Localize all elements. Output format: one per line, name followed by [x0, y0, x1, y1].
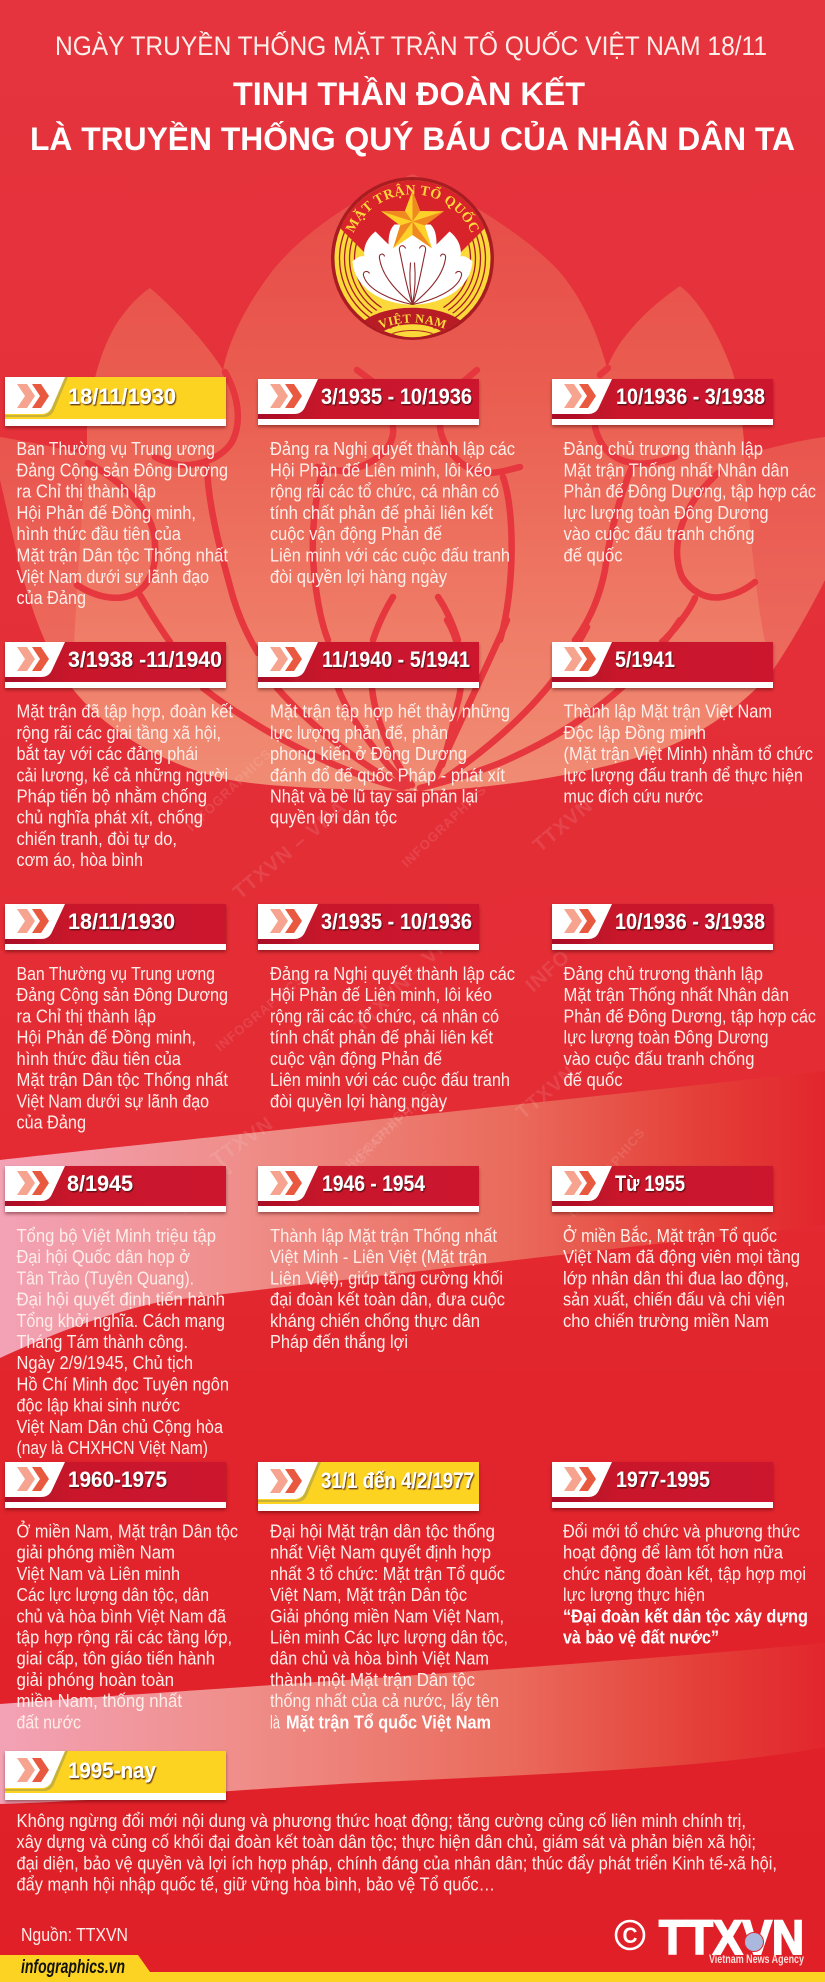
text: Không ngừng đổi mới: Không ngừng đổi mới nội dung và phương thức hoạt động; tăng cường củng cố liên minh chính trị, — [16, 1810, 746, 1831]
text: Thành lập Mặt trận Thống nhất: Liên Việt), giúp tăng cường khối — [270, 1267, 503, 1288]
watermarks: TTXVN – VNA — [350, 921, 465, 1037]
text: Đại hội Mặt trận dân tộc: Đại hội Mặt trận dân tộc thống — [270, 1520, 495, 1542]
header: 18/11/1930: 18/11/1930 — [68, 909, 175, 934]
text: Đảng ra Nghị quyết: Liên minh với các cuộc đấu tranh — [270, 544, 510, 566]
header: 10/1936 - 3/1938 — [552, 379, 773, 425]
text: Ở miền Bắc: cho chiến trường miền Nam — [563, 1310, 769, 1331]
text: Đại hội Mặt trận dân tộc: Giải phóng miền Nam Việt Nam, — [270, 1605, 504, 1626]
text: Thành lập Mặt trận Thống nhất: Pháp đến thắng lợi — [270, 1331, 408, 1352]
text: Đại hội Mặt trận dân tộc: thành một Mặt trận Dân tộc — [270, 1669, 475, 1690]
text: Ban Thường vụ: Việt Nam dưới sự lãnh đạo — [16, 566, 209, 587]
text: Ban Thường vụ: ra Chỉ thị thành lập — [16, 481, 156, 502]
header: 10/1936 - 3/1938: 10/1936 - 3/1938 — [616, 384, 765, 409]
header: 11/1940 - 5/1941 — [258, 642, 479, 688]
text: Đại hội Mặt trận dân tộc: thống nhất của cả nước, lấy tên — [270, 1690, 499, 1711]
header: 5/1941 — [552, 642, 773, 688]
text: Đảng ra Nghị quyết (repeat): Hội Phản đế Liên minh, lôi kéo — [270, 984, 492, 1005]
logo: TTXVN: TTXVN — [659, 1912, 804, 1965]
text: Ban Thường vụ: Hội Phản đế Đồng minh, — [16, 502, 196, 523]
text: Đảng ra Nghị quyết (repeat): rộng rãi các tổ chức, cá nhân có — [270, 1005, 499, 1026]
diagonal band lower — [0, 1643, 825, 1804]
text: Đảng chủ trương: đế quốc — [564, 544, 622, 566]
text: Ban Thường vụ: hình thức đầu tiên của — [16, 523, 182, 544]
text: Ở miền Nam: Các lực lượng dân tộc, dân — [16, 1584, 209, 1605]
header: 10/1936 - 3/1938 (repeat) — [552, 904, 773, 950]
emblem: Mặt trận Tổ quốc Việt Nam: MẶT TRẬN — [345, 184, 416, 234]
text: Đảng chủ trương (repeat): vào cuộc đấu tranh chống — [564, 1048, 754, 1069]
emblem: Mặt trận Tổ quốc Việt Nam — [331, 177, 494, 340]
text: Thành lập Mặt trận Thống nhất: Việt Minh - Liên Việt (Mặt trận — [270, 1246, 487, 1267]
text: Ở miền Bắc: lớp nhân dân thi đua lao động, — [563, 1267, 789, 1288]
header: 1977-1995 — [552, 1462, 773, 1508]
header: 1960-1975: 1960-1975 — [68, 1467, 167, 1492]
header: 11/1940 - 5/1941: 11/1940 - 5/1941 — [322, 647, 470, 672]
text: Đảng ra Nghị quyết: Hội Phản đế Liên minh, lôi kéo — [270, 459, 492, 480]
header: 8/1945: 8/1945 — [67, 1171, 133, 1196]
watermarks: INFOGRAPHICS — [399, 782, 489, 870]
text: Tổng bộ Việt Minh: Hồ Chí Minh đọc Tuyên ngôn — [16, 1373, 229, 1394]
text: Thành lập Mặt trận Việt Nam: Thành lập Mặt trận Việt Nam — [564, 701, 772, 722]
text: Đảng ra Nghị quyết: cuộc vận động Phản đế — [270, 523, 443, 544]
text: Đại hội Mặt trận dân tộc: Mặt trận Tổ quốc Việt Nam — [286, 1711, 491, 1732]
text: Ban Thường vụ (repeat) — [16, 963, 228, 1133]
text: Ban Thường vụ (repeat): của Đảng — [16, 1112, 86, 1133]
text: Mặt trận đã tập hợp — [16, 701, 233, 870]
text: Đảng chủ trương: lực lượng toàn Đông Dương — [564, 502, 768, 523]
text: Ban Thường vụ: Mặt trận Dân tộc Thống nhất — [16, 544, 228, 566]
text: Ban Thường vụ (repeat): Hội Phản đế Đồng minh, — [16, 1027, 196, 1048]
emblem: Mặt trận Tổ quốc Việt Nam: TỔ QUỐC — [420, 186, 479, 232]
text: Đổi mới tổ chức: lực lượng thực hiện — [563, 1584, 705, 1605]
text: Ban Thường vụ (repeat): Mặt trận Dân tộc Thống nhất — [16, 1069, 228, 1090]
text: Đảng ra Nghị quyết: Đảng ra Nghị quyết thành lập các — [270, 438, 515, 459]
text: Thành lập Mặt trận Thống nhất: kháng chiến chống thực dân — [270, 1310, 480, 1331]
text: Đại hội Mặt trận dân tộc: Liên minh Các lực lượng dân tộc, — [270, 1626, 508, 1648]
watermarks: TTXVN – VNA — [229, 796, 351, 904]
header: 10/1936 - 3/1938 (repeat): 10/1936 - 3/1938 — [615, 909, 765, 934]
text: Đổi mới tổ chức — [563, 1520, 808, 1648]
logo: TTXVN: C — [622, 1923, 638, 1948]
header: 1995-nay (highlight): 1995-nay — [68, 1758, 157, 1783]
text: Ở miền Nam — [16, 1520, 238, 1732]
text: Ở miền Nam: đất nước — [16, 1711, 81, 1732]
watermarks: INFOGRAPHICS — [212, 971, 307, 1054]
text: Ban Thường vụ (repeat): Ban Thường vụ Trung ương — [16, 963, 215, 984]
text: Mặt trận tập hợp — [270, 701, 510, 828]
watermarks: INFOGRAPHICS — [565, 1125, 648, 1220]
text: Đảng ra Nghị quyết (repeat) — [270, 963, 515, 1111]
text: Đại hội Mặt trận dân tộc: là — [270, 1711, 280, 1732]
ribbon — [364, 308, 460, 332]
text: Tổng bộ Việt Minh: Tổng khởi nghĩa. Cách mạng — [16, 1310, 225, 1331]
text: Đảng chủ trương (repeat): lực lượng toàn Đông Dương — [564, 1027, 768, 1048]
title: TINH THẦN ĐOÀN KẾT — [233, 76, 585, 112]
star — [381, 190, 444, 248]
text: Đảng chủ trương: Mặt trận Thống nhất Nhân dân — [564, 459, 789, 480]
text: Thành lập Mặt trận Thống nhất: Thành lập Mặt trận Thống nhất — [270, 1225, 497, 1246]
text: Tổng bộ Việt Minh: Tháng Tám thành công. — [16, 1331, 188, 1352]
text: Đại hội Mặt trận dân tộc: Việt Nam, Mặt trận Dân tộc — [270, 1584, 467, 1605]
watermarks: INFO — [522, 946, 575, 997]
text: Thành lập Mặt trận Việt Nam: Độc lập Đồng minh — [564, 722, 706, 743]
text: Ban Thường vụ: Đảng Cộng sản Đông Dương — [16, 459, 228, 480]
text: Ở miền Nam: Việt Nam và Liên minh — [16, 1563, 180, 1584]
header: 18/11/1930 (highlight) — [5, 377, 226, 426]
text: Mặt trận đã tập hợp: Mặt trận đã tập hợp, đoàn kết — [16, 701, 233, 722]
text: Mặt trận đã tập hợp: bắt tay với các đảng phái — [16, 743, 198, 764]
text: Ban Thường vụ: của Đảng — [16, 587, 86, 608]
text: Ở miền Nam: giải phóng miền Nam — [16, 1542, 175, 1563]
text: Ở miền Nam: giải phóng hoàn toàn — [16, 1669, 174, 1690]
header: 31/1 đến 4/2/1977 (highlight) — [258, 1462, 479, 1511]
text: Ở miền Nam: tập hợp rộng rãi các tầng lớp, — [16, 1626, 232, 1648]
text: Đảng chủ trương (repeat): Mặt trận Thống nhất Nhân dân — [564, 984, 789, 1005]
text: Tổng bộ Việt Minh: Đại hội Quốc dân họp ở — [16, 1246, 190, 1267]
text: Mặt trận tập hợp: Nhật và bè lũ tay sai phản lại — [270, 786, 478, 806]
header: 3/1938 -11/1940 — [5, 642, 226, 688]
text: Đảng chủ trương (repeat): đế quốc — [564, 1069, 622, 1090]
text: Ban Thường vụ (repeat): hình thức đầu tiên của — [16, 1048, 182, 1069]
text: Tổng bộ Việt Minh — [16, 1225, 229, 1458]
text: Đổi mới tổ chức: Đổi mới tổ chức và phương thức — [563, 1520, 800, 1542]
header: Từ 1955 — [552, 1166, 773, 1212]
text: Ở miền Bắc: sản xuất, chiến đấu và chi viện — [563, 1289, 785, 1310]
text: Đảng ra Nghị quyết: đòi quyền lợi hàng ngày — [270, 566, 448, 587]
header: 3/1935 - 10/1936 (repeat): 3/1935 - 10/1936 — [321, 909, 472, 934]
header: 3/1935 - 10/1936 (repeat) — [258, 904, 479, 950]
text: Đổi mới tổ chức: và bảo vệ đất nước” — [563, 1626, 719, 1648]
text: Tổng bộ Việt Minh: Việt Nam Dân chủ Cộng hòa — [16, 1416, 224, 1437]
text: Tổng bộ Việt Minh: Đại hội quyết định tiến hành — [16, 1289, 225, 1310]
text: Đảng ra Nghị quyết: tính chất phản đế phải liên kết — [270, 502, 493, 523]
text: Tổng bộ Việt Minh: Tổng bộ Việt Minh triệu tập — [16, 1225, 216, 1246]
header: 1977-1995: 1977-1995 — [616, 1467, 710, 1492]
text: Tổng bộ Việt Minh: (nay là CHXHCN Việt Nam) — [16, 1437, 208, 1458]
header: 1946 - 1954 — [258, 1166, 479, 1212]
text: Ở miền Bắc — [563, 1225, 800, 1331]
text: Ban Thường vụ: Ban Thường vụ Trung ương — [16, 438, 215, 459]
text: Mặt trận tập hợp: quyền lợi dân tộc — [270, 807, 397, 828]
text: Đảng ra Nghị quyết (repeat): Đảng ra Nghị quyết thành lập các — [270, 963, 515, 984]
text: Thành lập Mặt trận Việt Nam — [564, 701, 813, 806]
text: Mặt trận đã tập hợp: Pháp tiến bộ nhằm chống — [16, 786, 207, 806]
text: Mặt trận đã tập hợp: cơm áo, hòa bình — [16, 849, 143, 870]
text: Ở miền Nam: giai cấp, tôn giáo tiến hành — [16, 1648, 215, 1669]
text: Đảng ra Nghị quyết — [270, 438, 515, 587]
header: 18/11/1930 (highlight): 18/11/1930 — [68, 384, 176, 409]
text: Đại hội Mặt trận dân tộc: nhất 3 tổ chức: Mặt trận Tổ quốc — [270, 1563, 505, 1584]
text: Đảng chủ trương (repeat): Đảng chủ trương thành lập — [564, 963, 763, 984]
text: Không ngừng đổi mới: xây dựng và củng cố khối đại đoàn kết toàn dân tộc; thực hiện dân chủ, giám sát và phản biện xã hội; — [16, 1831, 756, 1852]
text: Tổng bộ Việt Minh: độc lập khai sinh nước — [16, 1395, 180, 1416]
header: 3/1935 - 10/1936 — [258, 379, 479, 425]
text: Ở miền Nam: miền Nam, thống nhất — [16, 1690, 182, 1711]
subtitle line: NGÀY TRUYỀN THỐNG MẶT TRẬN TỔ QUỐC VIỆT NAM 18/11 — [55, 29, 767, 61]
text: Đảng chủ trương — [564, 438, 816, 566]
text: Mặt trận tập hợp: đánh đổ đế quốc Pháp - phát xít — [270, 764, 505, 785]
bottom yellow strip — [0, 1955, 825, 1982]
text: Đảng ra Nghị quyết (repeat): tính chất phản đế phải liên kết — [270, 1027, 493, 1048]
header: 18/11/1930 — [5, 904, 226, 950]
title: LÀ TRUYỀN THỐNG QUÝ BÁU CỦA NHÂN DÂN TA — [30, 121, 795, 157]
header: 1946 - 1954: 1946 - 1954 — [322, 1171, 426, 1196]
text: Không ngừng đổi mới: đẩy mạnh hội nhập quốc tế, giữ vững hòa bình, bảo vệ Tổ quốc… — [16, 1874, 495, 1894]
header: 1995-nay (highlight) — [5, 1751, 226, 1800]
text: Mặt trận đã tập hợp: cải lương, kể cả những người — [16, 764, 228, 785]
title — [30, 29, 795, 157]
header: 31/1 đến 4/2/1977 (highlight): 31/1 đến 4/2/1977 — [321, 1468, 474, 1493]
website: infographics.vn — [21, 1957, 125, 1978]
text: Đảng ra Nghị quyết (repeat): đòi quyền lợi hàng ngày — [270, 1090, 448, 1111]
text: Đảng ra Nghị quyết: rộng rãi các tổ chức, cá nhân có — [270, 481, 499, 502]
text: Mặt trận tập hợp: phong kiến ở Đông Dương — [270, 743, 467, 764]
lotus — [352, 224, 472, 304]
watermarks: TTXVN — [512, 1062, 580, 1124]
text: Mặt trận đã tập hợp: chiến tranh, đòi tự do, — [16, 828, 177, 849]
watermarks: INFOGRAPHICS — [184, 746, 274, 834]
text: Mặt trận tập hợp: Mặt trận tập hợp hết thảy những — [270, 701, 510, 722]
watermarks: TTXVN — [529, 795, 597, 857]
text: Đảng ra Nghị quyết (repeat): cuộc vận động Phản đế — [270, 1048, 443, 1069]
text: Đại hội Mặt trận dân tộc: dân chủ và hòa bình Việt Nam — [270, 1648, 489, 1669]
watermarks: TTXVN — [207, 1113, 278, 1171]
text: Ban Thường vụ (repeat): ra Chỉ thị thành lập — [16, 1005, 156, 1026]
watermarks: INFOGRAPHICS — [342, 1086, 435, 1172]
text: Thành lập Mặt trận Thống nhất — [270, 1225, 505, 1352]
emblem: Mặt trận Tổ quốc Việt Nam: VIỆT NAM — [378, 312, 447, 329]
text: Mặt trận đã tập hợp: rộng rãi các giai tầng xã hội, — [16, 722, 221, 743]
text: Đảng chủ trương (repeat) — [564, 963, 816, 1090]
header: 1960-1975 — [5, 1462, 226, 1508]
text: Đổi mới tổ chức: hoạt động để làm tốt hơn nữa — [563, 1542, 784, 1563]
text: Đại hội Mặt trận dân tộc — [270, 1520, 508, 1732]
text: Ở miền Nam: chủ và hòa bình Việt Nam đã — [16, 1605, 227, 1626]
header: 8/1945 — [5, 1166, 226, 1212]
text: Ở miền Bắc: Ở miền Bắc, Mặt trận Tổ quốc — [563, 1225, 777, 1246]
text: Tổng bộ Việt Minh: Ngày 2/9/1945, Chủ tịch — [16, 1352, 193, 1373]
text: Thành lập Mặt trận Thống nhất: đại đoàn kết toàn dân, đưa cuộc — [270, 1289, 505, 1310]
text: Đảng chủ trương: vào cuộc đấu tranh chống — [564, 523, 754, 544]
text: Ban Thường vụ (repeat): Việt Nam dưới sự lãnh đạo — [16, 1090, 209, 1111]
text: Ở miền Nam: Ở miền Nam, Mặt trận Dân tộc — [16, 1520, 238, 1542]
text: Ban Thường vụ — [16, 438, 228, 608]
source: Nguồn: TTXVN — [21, 1925, 128, 1945]
header: 5/1941: 5/1941 — [615, 647, 675, 672]
header: Từ 1955: Từ 1955 — [615, 1171, 685, 1196]
text: Mặt trận đã tập hợp: chủ nghĩa phát xít, chống — [16, 807, 203, 828]
text: Đảng ra Nghị quyết (repeat): Liên minh với các cuộc đấu tranh — [270, 1069, 510, 1090]
watermarks — [171, 746, 648, 1222]
text: Tổng bộ Việt Minh: Tân Trào (Tuyên Quang). — [16, 1267, 194, 1288]
header: 3/1938 -11/1940: 3/1938 -11/1940 — [68, 647, 222, 672]
text: Mặt trận tập hợp: lực lượng phản đế, phản — [270, 722, 448, 743]
header: 3/1935 - 10/1936: 3/1935 - 10/1936 — [321, 384, 472, 409]
text: Không ngừng đổi mới — [16, 1810, 777, 1894]
text: Ở miền Bắc: Việt Nam đã động viên mọi tầng — [563, 1246, 800, 1267]
diagonal band upper — [0, 1071, 825, 1358]
text: Thành lập Mặt trận Việt Nam: mục đích cứu nước — [564, 786, 703, 806]
watermarks: INFOGRAPHICS — [328, 1100, 414, 1193]
text: Ban Thường vụ (repeat): Đảng Cộng sản Đông Dương — [16, 984, 228, 1005]
text: Đảng chủ trương: Đảng chủ trương thành lập — [564, 438, 763, 459]
text: Đại hội Mặt trận dân tộc: nhất Việt Nam quyết định hợp — [270, 1542, 491, 1563]
watermarks: TTXVN — [171, 1158, 238, 1222]
lotus background — [0, 174, 825, 791]
